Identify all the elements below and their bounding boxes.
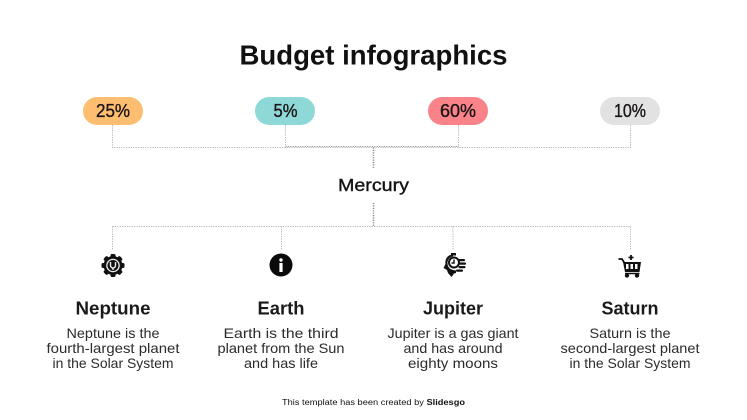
column: Jupiter: eighty moons	[408, 355, 498, 371]
icon: hand with stopwatch	[444, 253, 466, 277]
column: Saturn: Saturn	[602, 298, 658, 318]
pill: 5%	[255, 97, 315, 125]
column: Saturn: Saturn is the	[590, 325, 671, 341]
pill: 25%	[83, 97, 143, 125]
column: Neptune: in the Solar System	[52, 355, 174, 371]
pill: 5%: 5%	[274, 101, 298, 121]
column: Neptune: Neptune	[76, 298, 150, 318]
column: Earth: Earth	[258, 298, 304, 318]
pill: 10%	[600, 97, 660, 125]
column: Earth: and has life	[244, 355, 318, 371]
icon: info	[270, 254, 292, 276]
column: Saturn	[560, 298, 700, 371]
column: Jupiter: and has around	[404, 340, 502, 356]
column: Earth	[218, 298, 344, 371]
footer credit: This template has been created by Slidesgo	[282, 398, 465, 407]
pill: 10%: 10%	[614, 101, 646, 121]
pill: 60%	[428, 97, 488, 125]
column: Earth: Earth is the third	[224, 325, 338, 341]
title: Budget infographics	[240, 40, 508, 70]
column: Saturn: in the Solar System	[570, 355, 690, 371]
column: Neptune	[46, 298, 180, 371]
column: Jupiter	[388, 298, 519, 371]
column: Neptune: fourth-largest planet	[46, 340, 180, 356]
column: Jupiter: Jupiter	[423, 298, 483, 318]
icon: gear with wrench	[102, 254, 124, 277]
pill: 25%: 25%	[96, 101, 130, 121]
column: Saturn: second-largest planet	[560, 340, 700, 356]
column: Earth: planet from the Sun	[218, 340, 344, 356]
column: Jupiter: Jupiter is a gas giant	[388, 325, 519, 341]
column: Neptune: Neptune is the	[66, 325, 160, 341]
icon: shopping cart	[618, 255, 641, 278]
central label: Mercury: Mercury	[338, 175, 409, 195]
pill: 60%: 60%	[440, 101, 476, 121]
